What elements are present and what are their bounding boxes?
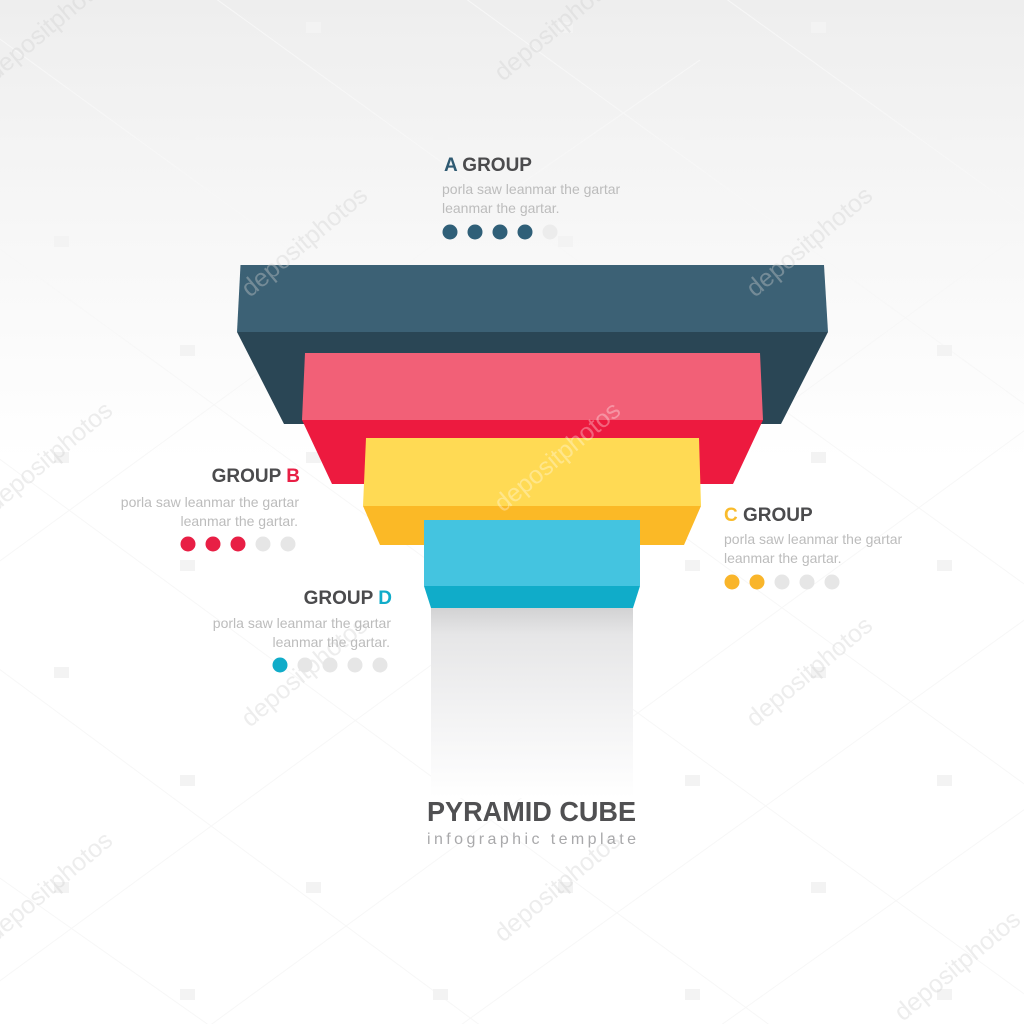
tier B: red [302,353,763,484]
tier D: cyan [424,520,640,608]
heading: C group: C GROUP [724,505,813,526]
callout: group D [213,588,392,672]
watermarks: depositphotos [489,826,626,948]
watermarks: depositphotos [741,611,878,733]
callout: C group [724,505,903,590]
pyramid chart [237,265,828,608]
heading: A group: A GROUP [444,155,532,176]
watermarks: depositphotos [236,181,373,303]
watermarks: depositphotos [741,181,878,303]
tier A: dark blue [237,265,828,424]
description: group B: porla saw leanmar the gartar [121,494,299,510]
description: group D: leanmar the gartar. [272,634,390,650]
callout: A group [442,155,621,240]
heading: group B: GROUP B [212,466,300,487]
rating dots: group B [180,536,296,552]
description: A group: leanmar the gartar. [442,200,560,216]
callout: group B [121,466,300,552]
watermarks: depositphotos [489,396,626,518]
tier C: yellow [363,438,701,545]
description: C group: leanmar the gartar. [724,550,842,566]
description: C group: porla saw leanmar the gartar [724,531,902,547]
rating dots: A group [442,224,558,240]
title: PYRAMID CUBE [427,796,636,827]
rating dots: C group [724,574,840,590]
heading: group D: GROUP D [304,588,392,609]
rating dots: group D [272,658,388,672]
watermarks: depositphotos [236,611,373,733]
subtitle: infographic template [427,831,636,848]
description: A group: porla saw leanmar the gartar [442,181,620,197]
shadow under pyramid [431,608,633,798]
description: group D: porla saw leanmar the gartar [213,615,391,631]
description: group B: leanmar the gartar. [180,513,298,529]
